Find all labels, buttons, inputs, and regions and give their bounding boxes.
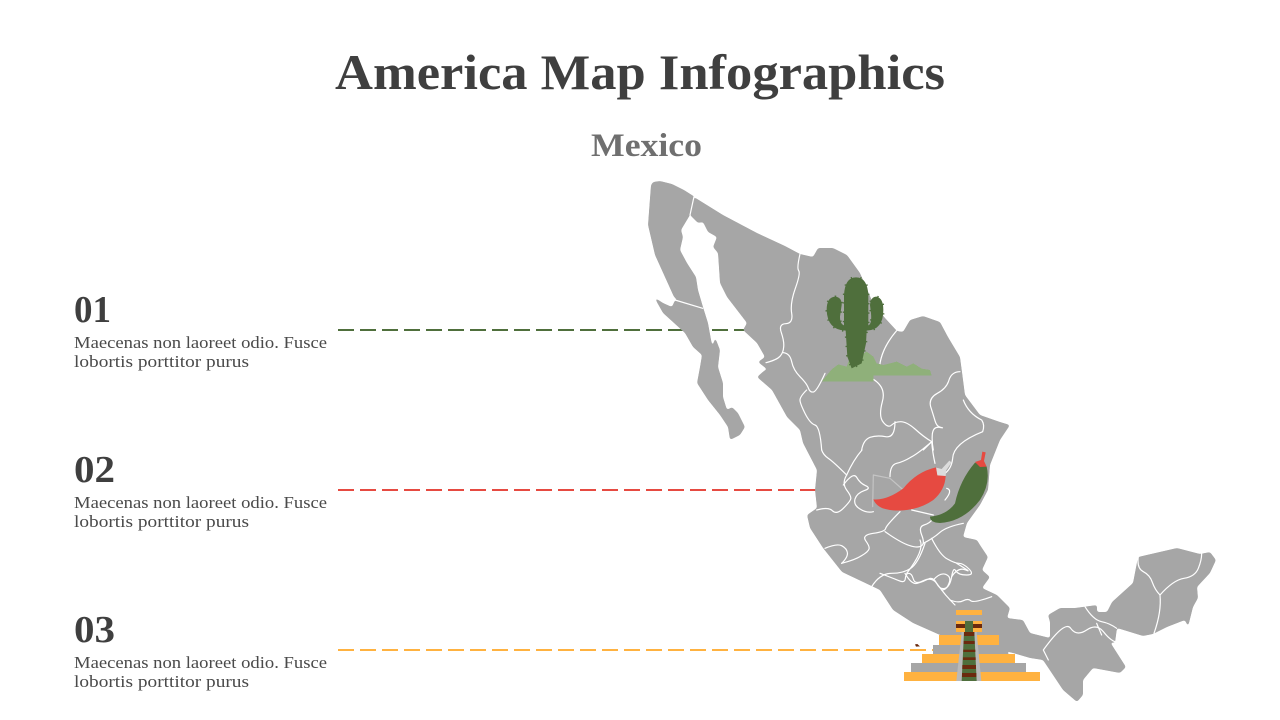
icon: red chili bbox=[873, 461, 952, 510]
dashed connector 01 bbox=[338, 329, 748, 331]
bush bbox=[822, 352, 932, 382]
text block 03 bbox=[74, 609, 327, 691]
green chili body bbox=[930, 463, 988, 523]
text block 02: Maecenas non laoreet odio. Fusce bbox=[74, 493, 327, 512]
icon: Mayan pyramid bbox=[904, 610, 1040, 681]
red chili body bbox=[873, 467, 946, 510]
text block 01: 01 bbox=[74, 289, 111, 331]
text block 01: lobortis porttitor purus bbox=[74, 352, 249, 371]
title: America Map Infographics bbox=[335, 44, 945, 100]
state borders: south and Yucatan bbox=[880, 540, 1202, 660]
region: mainland Mexico bbox=[690, 197, 1216, 702]
dashed connector 02 bbox=[338, 489, 820, 491]
dashed connector 03 bbox=[338, 649, 934, 651]
icon: green chili bbox=[930, 452, 988, 523]
text block 03: lobortis porttitor purus bbox=[74, 672, 249, 691]
staircase bbox=[956, 632, 981, 681]
text block 02 bbox=[74, 449, 327, 531]
subtitle: Mexico: Mexico bbox=[591, 128, 702, 164]
text block 01 bbox=[74, 289, 327, 371]
text block 03: 03 bbox=[74, 609, 115, 651]
text block 02: lobortis porttitor purus bbox=[74, 512, 249, 531]
text block 01: Maecenas non laoreet odio. Fusce bbox=[74, 333, 327, 352]
text block 03: Maecenas non laoreet odio. Fusce bbox=[74, 653, 327, 672]
text block 02: 02 bbox=[74, 449, 115, 491]
region: Baja California peninsula bbox=[648, 181, 745, 440]
state borders: north bbox=[675, 197, 960, 450]
red chili stem bbox=[936, 461, 952, 476]
icon: cactus with bushes bbox=[822, 277, 932, 382]
state borders: central bbox=[817, 400, 984, 589]
green chili stem bbox=[975, 452, 987, 467]
map of Mexico bbox=[648, 181, 1216, 702]
cactus bbox=[827, 277, 883, 368]
